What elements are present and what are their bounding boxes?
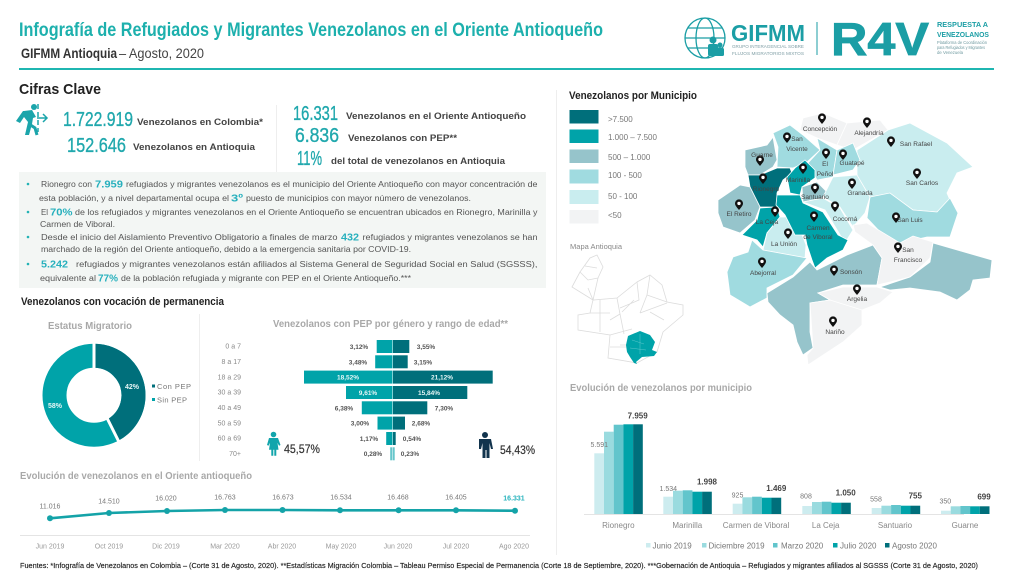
bar values: 1.469 [766, 484, 787, 493]
male percentages: 2,68% [412, 420, 430, 428]
map labels: Abejorral [750, 270, 777, 277]
map labels: Peñol [817, 171, 834, 178]
bar categories: Guarne [952, 521, 979, 530]
heading: evolución por municipio: Evolución de venezolanos por municipio [570, 382, 752, 394]
municipality: Granada [823, 175, 870, 227]
bullet: 70%: El [41, 208, 48, 217]
heading: PEP por género: Venezolanos con PEP por género y rango de edad** [273, 318, 509, 330]
female percentages: 0,28% [364, 451, 382, 458]
map labels: San [902, 247, 914, 254]
heading: Mapa Antioquia: Mapa Antioquia [570, 242, 623, 251]
map legend: 50 - 100 [608, 192, 638, 201]
bar values: 808 [800, 494, 812, 500]
line months: May 2020 [326, 544, 356, 550]
map labels: Santuario [801, 194, 829, 201]
line values: 16.405 [445, 494, 467, 502]
map labels: San Luis [897, 217, 923, 224]
bar legend: Agosto 2020 [892, 542, 937, 550]
municipality: Concepción [800, 113, 847, 145]
header rule [19, 68, 994, 70]
municipality: Abejorral [727, 240, 807, 307]
map labels: El [822, 161, 828, 168]
female percentages [335, 344, 382, 458]
bar categories: Rionegro [602, 521, 635, 530]
bar values: 5.591 [591, 442, 608, 449]
map labels: Guatapé [840, 160, 865, 167]
key figures: Oriente Antioqueño: 11% [297, 148, 322, 170]
divider [276, 105, 277, 178]
key figures: Colombia and Antioquia: 152.646 [67, 135, 126, 157]
donut chart: 42% [125, 384, 140, 391]
line values: 16.331 [503, 496, 525, 502]
logo: R4V [831, 13, 989, 65]
group: Carmen de Viboral [733, 497, 781, 514]
icon: woman [267, 432, 280, 456]
logo: GIFMM: GRUPO INTERAGENCIAL SOBRE [732, 44, 804, 49]
female percentages: 6,38% [335, 406, 353, 412]
donut legend: Sin PEP [157, 396, 187, 404]
panel: key messages [19, 172, 546, 288]
municipality: Guarne [745, 137, 777, 175]
heading: Cifras Clave: Cifras Clave [19, 81, 101, 98]
key figures: Oriente Antioqueño: Venezolanos en el Oriente Antioqueño [346, 111, 527, 121]
bar legend: Diciembre 2019 [708, 542, 765, 550]
municipality: San Francisco [853, 223, 933, 285]
age labels: 8 a 17 [222, 359, 241, 366]
bullet: 70%: Carmen de Viboral. [40, 220, 115, 229]
bar legend [646, 542, 937, 550]
bullet: Rionegro: refugiados y migrantes venezolanos es el municipio del Oriente Antioqueño con mayor concentración de [126, 180, 538, 189]
divider [199, 314, 200, 461]
bar values: 7.959 [628, 412, 648, 420]
male percentages: 0,23% [401, 451, 419, 458]
bar categories: Santuario [878, 521, 913, 530]
key figures: Oriente Antioqueño [293, 103, 527, 170]
inset map: Antioquia [572, 255, 683, 364]
municipality: Argelia [810, 287, 893, 310]
map labels: Nariño [825, 329, 845, 336]
line months: Ago 2020 [499, 544, 529, 550]
icon: migrant walking [16, 104, 47, 135]
bar values [591, 412, 991, 506]
map labels: Concepción [803, 126, 838, 133]
line months: Jun 2019 [36, 544, 65, 550]
donut chart: 58% [48, 403, 63, 410]
female percentages: 3,12% [350, 344, 368, 351]
bar categories: La Ceja [812, 521, 840, 530]
map labels: Marinilla [786, 177, 810, 184]
group: Santuario [872, 505, 920, 514]
age labels: 0 a 7 [225, 344, 241, 350]
heading: vocación de permanencia: Venezolanos con vocación de permanencia [21, 296, 225, 308]
line values: 16.468 [387, 494, 409, 502]
map labels: El Retiro [727, 211, 752, 218]
bullet: Rionegro: 7.959 [95, 180, 123, 190]
bar legend: Julio 2020 [840, 542, 877, 550]
bullet: Rionegro: puesto de municipios con mayor número de venezolanos. [246, 194, 471, 203]
map labels: Argelia [847, 296, 868, 303]
bar values: 1.534 [660, 486, 677, 493]
logo: R4V: VENEZOLANOS [937, 32, 989, 39]
municipality: Alejandría [837, 120, 888, 150]
bar values: 1.050 [836, 488, 856, 498]
male percentages: 3,15% [414, 360, 432, 366]
bullet: 432: refugiados y migrantes venezolanos se han [362, 233, 538, 242]
bullet: 432 [41, 232, 538, 254]
bar values: 699 [977, 492, 991, 502]
subtitle: GIFMM Antioquia [21, 46, 117, 61]
municipality: La Unión [763, 217, 806, 258]
key figures: Oriente Antioqueño: 16.331 [293, 103, 338, 125]
bullet: 5.242: 77% [98, 274, 118, 284]
heading: por municipio: Venezolanos por Municipio [569, 90, 697, 102]
line chart [20, 494, 530, 550]
bullet: Rionegro: 3º [231, 194, 243, 204]
age labels: 30 a 39 [218, 390, 241, 396]
map labels: Carmen [806, 225, 830, 232]
age labels: 18 a 29 [218, 374, 241, 382]
municipality: San Luis [867, 193, 958, 243]
male percentages [401, 344, 453, 458]
map legend [570, 110, 657, 224]
map legend: 1.000 – 7.500 [608, 133, 657, 142]
logo: R4V: de Venezuela [937, 50, 963, 55]
bar legend: Marzo 2020 [781, 542, 824, 550]
map labels: La Unión [771, 241, 797, 248]
line months [36, 544, 529, 550]
map labels: Vicente [786, 146, 808, 153]
map labels: de Viboral [803, 234, 833, 241]
line values: 16.763 [214, 494, 236, 502]
bar values: 1.998 [697, 478, 718, 486]
bar legend: Junio 2019 [652, 542, 692, 550]
key figures: Oriente Antioqueño: 6.836 [295, 125, 339, 147]
municipality: Sonsón [767, 245, 882, 355]
age labels: 60 a 69 [218, 436, 241, 442]
map labels: La Ceja [756, 219, 779, 226]
age labels: 70+ [229, 451, 241, 458]
map labels: Granada [847, 190, 873, 197]
key figures: Colombia and Antioquia [63, 109, 264, 157]
municipality: San Vicente [773, 125, 820, 168]
map labels: Francisco [894, 257, 922, 264]
bar values: 925 [732, 492, 743, 500]
map labels: San Carlos [906, 180, 939, 187]
bullet markers [27, 183, 29, 265]
line months: Oct 2019 [95, 544, 123, 550]
municipalities: San Rafael and San Carlos [857, 123, 973, 212]
municipality: El Peñol [808, 138, 837, 180]
female percentages: 9,61% [359, 390, 377, 397]
male percentages: 21,12% [431, 374, 453, 382]
group: Rionegro [594, 424, 643, 514]
age labels: 50 a 59 [218, 420, 241, 428]
icon: man [479, 432, 493, 458]
municipality: Carmen de Viboral [776, 195, 848, 268]
map labels: San [791, 136, 803, 143]
key figures: Colombia and Antioquia: 1.722.919 [63, 109, 133, 131]
key figures: Colombia and Antioquia: Venezolanos en Antioquia [133, 142, 256, 152]
group: Guarne [941, 506, 990, 514]
municipality: Santuario [802, 182, 830, 202]
bullet: 5.242: refugiados y migrantes venezolanos están afiliados al Sistema General de Seguridad Social en Salud (SGSSS), [76, 260, 538, 269]
male percentages: 7,30% [435, 406, 453, 412]
key figures: Colombia and Antioquia: Venezolanos en Colombia* [137, 117, 264, 127]
line values: 14.510 [98, 498, 120, 506]
population pyramid [218, 340, 493, 460]
female percentages: 3,48% [349, 360, 367, 366]
donut legend [152, 382, 191, 404]
bullet: 432: marchado de la región del Oriente antioqueño, debido a la emergencia sanitaria por COVID-19. [41, 245, 411, 254]
map labels: Cocorná [833, 216, 858, 223]
bullet: Rionegro [39, 180, 538, 204]
line months: Dic 2019 [152, 544, 180, 550]
male bars [393, 340, 493, 460]
donut legend: Con PEP [157, 382, 191, 391]
key figures: Oriente Antioqueño: del total de venezolanos en Antioquia [331, 156, 506, 166]
bullet: 70%: 70% [50, 208, 73, 218]
line values: 11.016 [40, 504, 61, 510]
logo: GIFMM: FLUJOS MIGRATORIOS MIXTOS [732, 51, 804, 56]
logo divider [816, 22, 818, 55]
map labels: San Rafael [900, 141, 933, 148]
bullet: 5.242: equivalente al [40, 274, 96, 283]
line values: 16.534 [330, 494, 352, 502]
map pins [735, 113, 921, 327]
bullet: 70% [40, 208, 538, 229]
bar values: 755 [909, 492, 923, 500]
group: La Ceja [802, 502, 851, 514]
line months: Jun 2020 [384, 544, 413, 550]
logo: GIFMM: GIFMM [731, 20, 805, 46]
female percentages: 1,17% [360, 436, 378, 443]
municipality: Guatapé [833, 143, 860, 175]
map legend: <50 [608, 211, 622, 220]
divider [556, 90, 557, 555]
line values [40, 494, 525, 510]
bullet: 70%: de los refugiados y migrantes venezolanos en el Oriente Antioqueño se encuentran ubicados en Rionegro, Marinilla y [75, 208, 538, 217]
map legend: 500 – 1.000 [608, 153, 651, 162]
age labels [218, 344, 241, 458]
bar categories [602, 521, 979, 530]
bullet: 5.242: de la población refugiada y migrante con PEP en el Oriente Antioqueño.*** [121, 274, 411, 283]
title: Infografía de Refugiados y Migrantes Venezolanos en el Oriente Antioqueño [19, 20, 603, 41]
bullet: Rionegro: Rionegro con [41, 180, 92, 189]
map legend: 100 - 500 [608, 171, 642, 180]
male percentages: 3,55% [417, 344, 435, 351]
municipality: Cocorná [803, 198, 853, 243]
male percentages: 15,84% [418, 390, 440, 397]
age labels: 40 a 49 [218, 405, 241, 412]
map legend: >7.500 [608, 115, 633, 124]
footer sources: Fuentes: *Infografía de Venezolanos en Colombia – (Corte 31 de Agosto, 2020). **Estadísticas Migración Colombia – Tableau Permiso Especial de Permanencia (Corte 18 de Septiembre, 2020). ***Gobernación de Antioquia – Refugiados y migrantes afiliados al SGSSS (Corte 31 de Agosto, 2020) [20, 561, 978, 570]
logo: R4V: para Refugiados y Migrantes [937, 45, 986, 50]
map labels: Alejandría [854, 130, 884, 137]
logo: R4V: Plataforma de Coordinación [937, 40, 987, 45]
bar categories: Marinilla [672, 521, 703, 530]
subtitle: – Agosto, 2020 [119, 46, 204, 61]
municipality: La Ceja [742, 207, 780, 247]
bullet: 432: 432 [341, 232, 359, 244]
logo: R4V: RESPUESTA A [937, 22, 988, 29]
bullet: 432: Desde el inicio del Aislamiento Preventivo Obligatorio a finales de marzo [41, 233, 338, 242]
municipality: eastern Sonsón [880, 243, 992, 300]
municipality: Marinilla [787, 160, 815, 195]
map: municipalities of Oriente Antioqueño [718, 113, 992, 365]
male percentages: 0,54% [403, 436, 421, 443]
map labels: Guarne [751, 152, 773, 159]
municipality: El Retiro [718, 185, 760, 233]
bullet: 5.242 [40, 260, 538, 284]
stat: women share: 45,57% [284, 442, 320, 456]
line values: 16.020 [155, 496, 177, 502]
bar chart [584, 412, 991, 550]
subtitle [21, 46, 204, 61]
heading: evolución Oriente: Evolución de venezolanos en el Oriente antioqueño [20, 470, 252, 482]
bullet: 5.242: 5.242 [41, 260, 68, 270]
logo: GIFMM [685, 18, 805, 58]
bar values: 350 [939, 498, 951, 506]
female percentages: 3,00% [351, 420, 369, 428]
municipality: Nariño [807, 300, 862, 365]
female percentages: 18,52% [337, 374, 359, 382]
map labels [727, 126, 939, 336]
bar values: 558 [870, 496, 882, 504]
group: Marinilla [663, 490, 712, 514]
bullet: Rionegro: esta población, y a nivel departamental ocupa el [39, 194, 229, 203]
female bars [304, 340, 392, 460]
donut chart [48, 340, 140, 442]
line months: Abr 2020 [268, 544, 296, 550]
map labels: Rionegro [753, 186, 780, 193]
heading: Estatus Migratorio: Estatus Migratorio [48, 320, 132, 332]
line months: Mar 2020 [210, 544, 240, 550]
map labels: Sonsón [840, 269, 862, 276]
municipality: Rionegro [748, 168, 792, 207]
key figures: Oriente Antioqueño: Venezolanos con PEP** [348, 133, 458, 143]
bar categories: Carmen de Viboral [723, 521, 789, 530]
logo: R4V: R4V [831, 13, 929, 65]
stat: men share: 54,43% [500, 443, 535, 457]
line values: 16.673 [272, 494, 294, 502]
line months: Jul 2020 [443, 544, 469, 550]
